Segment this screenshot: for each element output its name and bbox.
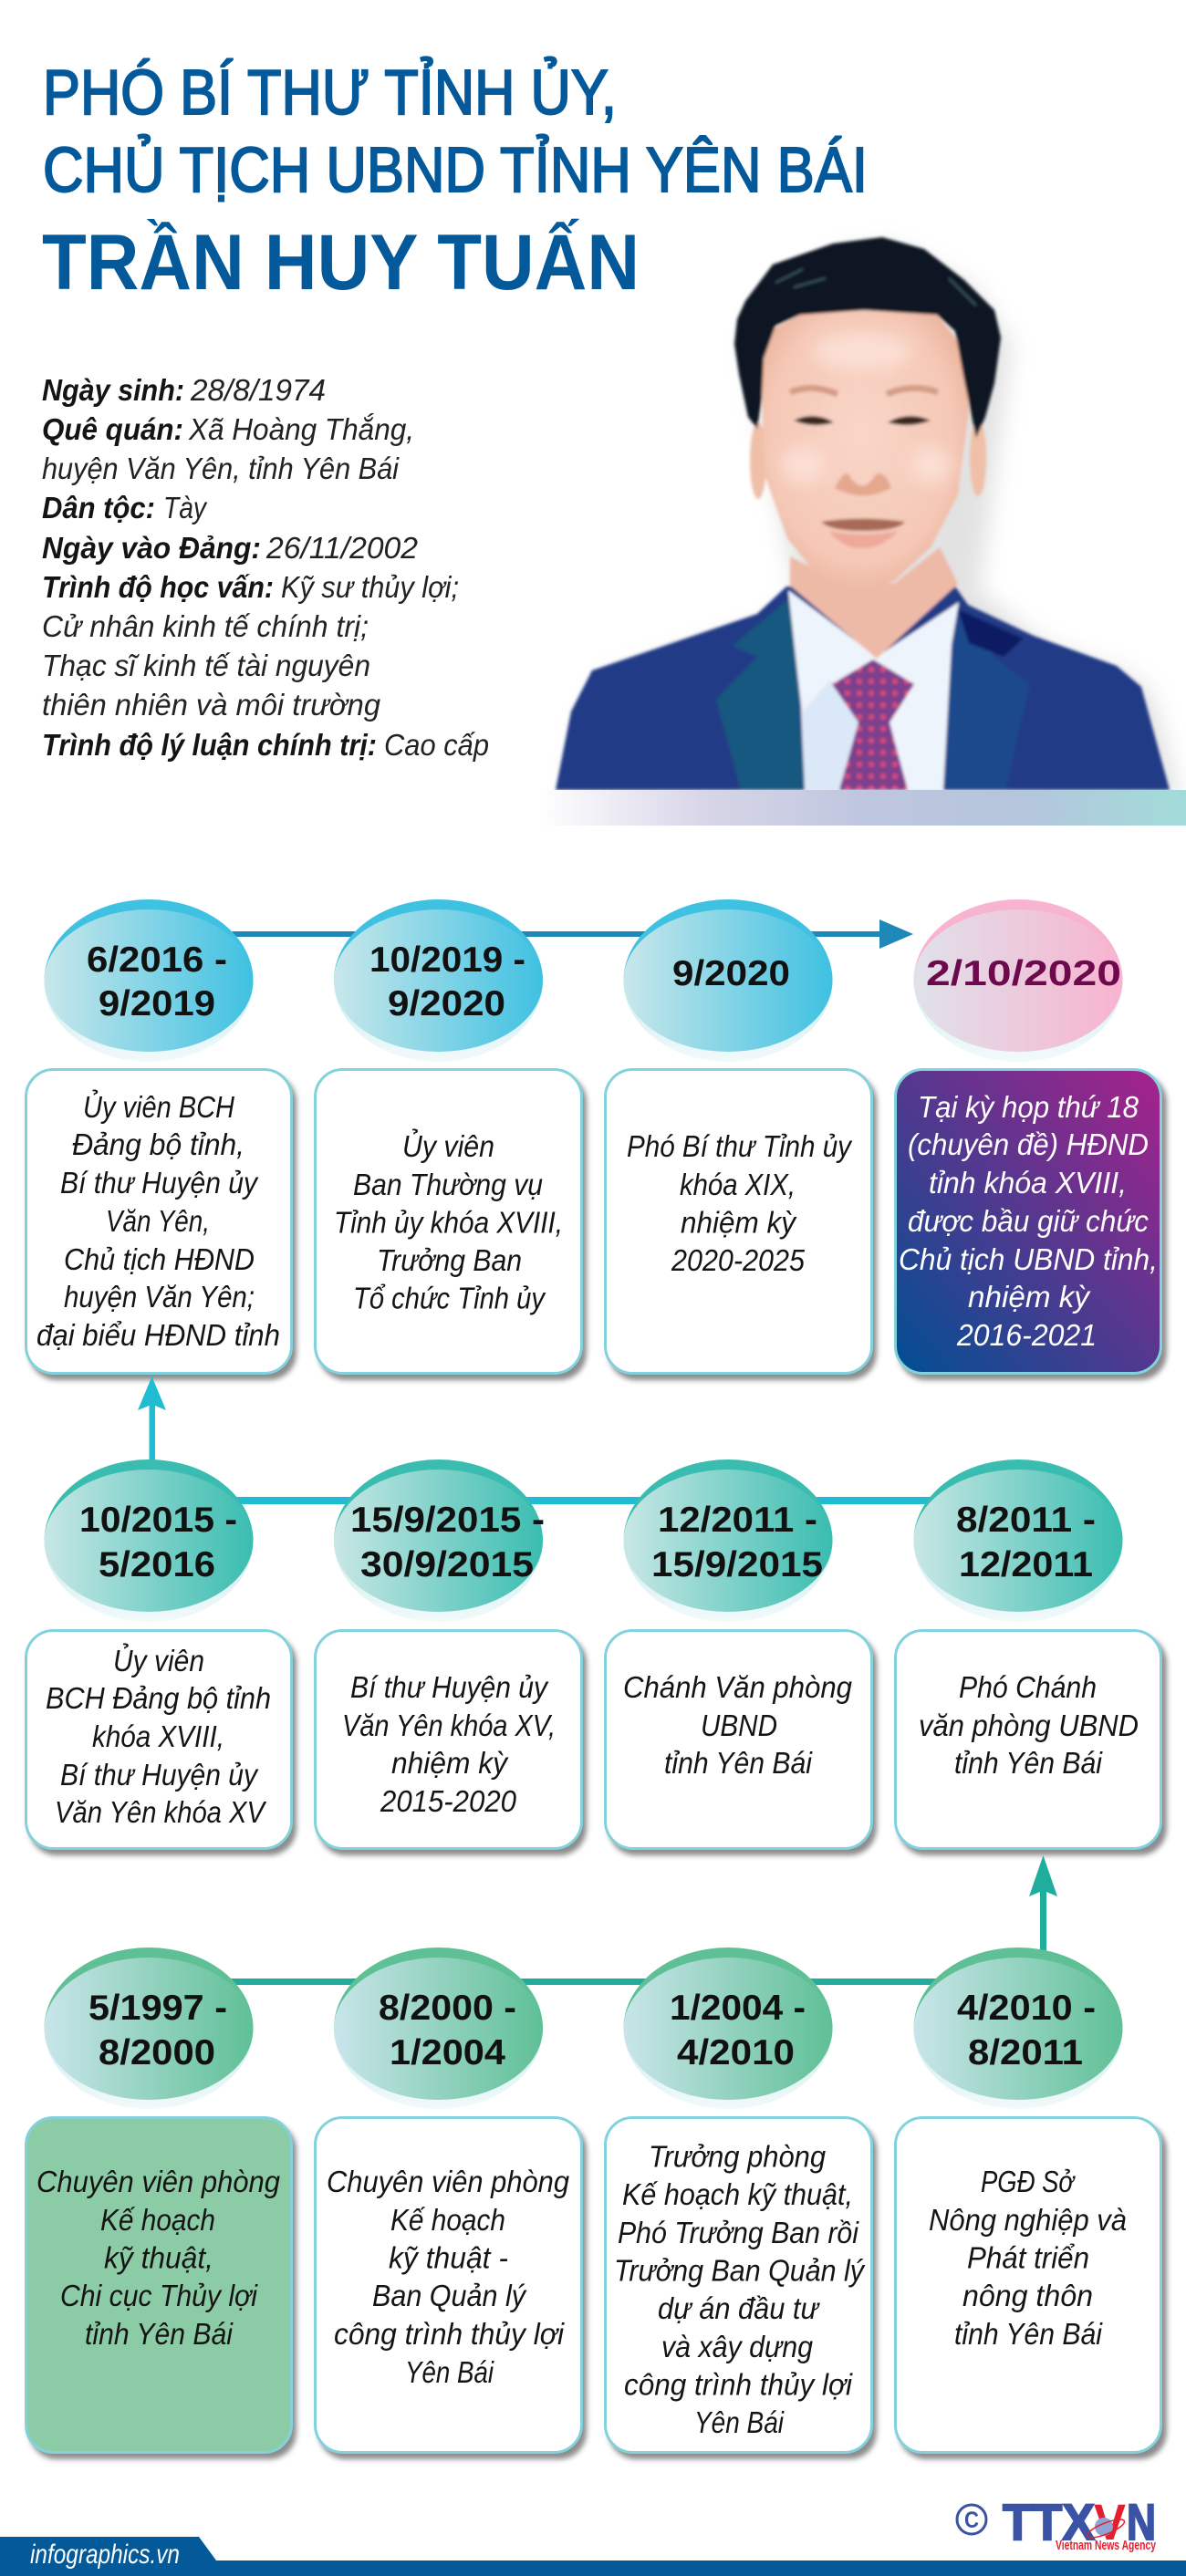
card: 2/10/2020 highlighted — [896, 1069, 1167, 1380]
shirt — [788, 590, 959, 790]
card: 12/2011: tỉnh Yên Bái — [664, 1746, 814, 1780]
card: 4/2010 — [896, 2118, 1167, 2459]
title: PHÓ BÍ THƯ TỈNH ỦY, — [43, 56, 617, 128]
date bubble: 12/2011 - 15/9/2015: 12/2011 - — [658, 1501, 817, 1540]
card: 8/2011 — [896, 1631, 1167, 1855]
card: 8/2000: Kế hoạch — [390, 2203, 505, 2237]
date bubble: 8/2000 - 1/2004: 1/2004 — [390, 2033, 505, 2072]
card: 15/9/2015: nhiệm kỳ — [391, 1746, 509, 1780]
text block: biography: Cao cấp — [384, 729, 489, 763]
text block: biography: Trình độ lý luận chính trị: — [42, 729, 377, 763]
date bubble: 2/10/2020 — [914, 899, 1122, 1062]
card: 10/2015: BCH Đảng bộ tỉnh — [46, 1681, 271, 1715]
card: 8/2000: Chuyên viên phòng — [327, 2165, 570, 2198]
card: 9/2020 — [606, 1069, 877, 1380]
card: 10/2019: Trưởng Ban — [377, 1243, 522, 1277]
card: 4/2010: nông thôn — [962, 2279, 1093, 2312]
date bubble: 1/2004 - 4/2010 — [624, 1948, 832, 2109]
date bubble: 9/2020 — [624, 899, 832, 1062]
card: 5/1997 highlighted: tỉnh Yên Bái — [85, 2317, 234, 2351]
date bubble: 8/2000 - 1/2004 — [334, 1948, 543, 2109]
card: 10/2015: khóa XVIII, — [92, 1719, 224, 1753]
text block: biography: Kỹ sư thủy lợi; — [281, 571, 459, 605]
hair — [734, 237, 1001, 438]
arrow: up to row 2 — [1029, 1855, 1057, 1952]
card: 2/10/2020 highlighted: Tại kỳ họp thứ 18 — [918, 1090, 1139, 1124]
card: 10/2015: Bí thư Huyện ủy — [60, 1758, 259, 1792]
date bubble: 10/2015 - 5/2016: 5/2016 — [99, 1545, 215, 1584]
logo: TTXVN — [957, 2493, 1156, 2553]
card: 6/2016: Ủy viên BCH — [83, 1089, 234, 1124]
card: 10/2019: Ban Thường vụ — [353, 1168, 543, 1201]
card: 1/2004: Trưởng Ban Quản lý — [614, 2253, 866, 2288]
date bubble: 5/1997 - 8/2000: 8/2000 — [99, 2033, 215, 2072]
text block: biography: Trình độ học vấn: — [42, 571, 274, 605]
card: 10/2019: Tổ chức Tỉnh ủy — [353, 1281, 546, 1315]
panel: timeline row 3 — [26, 1948, 1167, 2459]
tie — [832, 660, 914, 790]
text block: biography: Xã Hoàng Thắng, — [188, 413, 414, 447]
card: 2/10/2020 highlighted: Chủ tịch UBND tỉnh, — [899, 1242, 1158, 1276]
suit — [556, 587, 1170, 790]
text block: biography: huyện Văn Yên, tỉnh Yên Bái — [42, 452, 400, 486]
title: CHỦ TỊCH UBND TỈNH YÊN BÁI — [43, 133, 868, 205]
card: 10/2019: Ủy viên — [402, 1128, 494, 1163]
arrow: up to row 1 — [138, 1376, 166, 1464]
text block: biography: Quê quán: — [42, 413, 183, 447]
date bubble: 4/2010 - 8/2011: 4/2010 - — [957, 1989, 1096, 2028]
card: 6/2016: Chủ tịch HĐND — [64, 1242, 255, 1276]
date bubble: 10/2019 - 9/2020: 10/2019 - — [369, 940, 525, 980]
card: 6/2016: Văn Yên, — [106, 1204, 210, 1238]
date bubble: 1/2004 - 4/2010: 4/2010 — [677, 2033, 795, 2072]
date bubble: 10/2019 - 9/2020 — [334, 899, 543, 1062]
card: 12/2011: Chánh Văn phòng — [623, 1670, 853, 1704]
date bubble: 9/2020: 9/2020 — [672, 954, 790, 993]
card: 4/2010: PGĐ Sở — [981, 2165, 1077, 2198]
title: TRẦN HUY TUẤN — [42, 219, 640, 306]
card: 2/10/2020 highlighted: 2016-2021 — [956, 1318, 1097, 1352]
card: 6/2016: Bí thư Huyện ủy — [60, 1166, 259, 1200]
card: 5/1997 highlighted: Chi cục Thủy lợi — [60, 2279, 259, 2312]
card: 4/2010: Phát triển — [967, 2240, 1089, 2275]
card: 12/2011: UBND — [701, 1709, 777, 1742]
date bubble: 15/9/2015 - 30/9/2015 — [334, 1459, 545, 1622]
date bubble: 5/1997 - 8/2000 — [44, 1948, 254, 2109]
card: 9/2020: Phó Bí thư Tỉnh ủy — [627, 1129, 853, 1163]
date bubble: 15/9/2015 - 30/9/2015: 30/9/2015 — [360, 1545, 534, 1584]
date bubble: 6/2016 - 9/2019: 6/2016 - — [87, 940, 227, 980]
card: 5/1997 highlighted: Chuyên viên phòng — [36, 2165, 281, 2198]
text block: biography: 26/11/2002 — [265, 532, 418, 566]
card: 10/2015: Ủy viên — [113, 1643, 204, 1678]
arrow: row 1 connector — [149, 919, 913, 949]
card: 2/10/2020 highlighted: (chuyên đề) HĐND — [908, 1127, 1149, 1161]
card: 15/9/2015 — [316, 1631, 587, 1855]
cheek highlights — [781, 333, 951, 483]
card: 15/9/2015: 2015-2020 — [380, 1784, 517, 1818]
logo: TTXVN: V — [1094, 2493, 1126, 2550]
card: 8/2000: Yên Bái — [405, 2355, 494, 2389]
card: 5/1997 highlighted: Kế hoạch — [100, 2203, 215, 2237]
text block: biography: Ngày sinh: — [42, 374, 184, 408]
text block: biography: Thạc sĩ kinh tế tài nguyên — [42, 649, 370, 683]
card: 1/2004: Phó Trưởng Ban rồi — [618, 2216, 860, 2249]
card: 9/2020: 2020-2025 — [671, 1243, 806, 1277]
card: 8/2011: văn phòng UBND — [919, 1709, 1139, 1742]
footer bar with site name: infographics.vn — [30, 2540, 180, 2570]
card: 8/2000: kỹ thuật - — [389, 2240, 508, 2275]
card: 2/10/2020 highlighted: tỉnh khóa XVIII, — [929, 1166, 1127, 1200]
date bubble: 2/10/2020: 2/10/2020 — [926, 954, 1121, 993]
date bubble: 8/2011 - 12/2011 — [914, 1459, 1122, 1622]
date bubble: 4/2010 - 8/2011 — [914, 1948, 1122, 2109]
date bubble: 10/2015 - 5/2016: 10/2015 - — [79, 1501, 237, 1540]
card: 4/2010: Nông nghiệp và — [929, 2203, 1127, 2237]
text block: biography: Dân tộc: — [42, 492, 155, 525]
text block: biography: thiên nhiên và môi trường — [42, 689, 380, 722]
date bubble: 1/2004 - 4/2010: 1/2004 - — [670, 1989, 806, 2028]
nose — [835, 473, 891, 496]
card: 8/2011: tỉnh Yên Bái — [954, 1746, 1104, 1780]
text block: biography: Ngày vào Đảng: — [42, 532, 261, 566]
gradient band under portrait — [538, 790, 1186, 826]
card: 1/2004: Kế hoạch kỹ thuật, — [622, 2177, 853, 2211]
card: 8/2011: Phó Chánh — [959, 1670, 1097, 1704]
card: 10/2019 — [316, 1069, 587, 1380]
card: 10/2015: Văn Yên khóa XV — [55, 1795, 267, 1829]
card: 6/2016: Đảng bộ tỉnh, — [72, 1127, 244, 1161]
card: 8/2000: Ban Quản lý — [372, 2279, 527, 2312]
date bubble: 6/2016 - 9/2019: 9/2019 — [99, 984, 215, 1023]
card: 2/10/2020 highlighted: được bầu giữ chức — [908, 1204, 1149, 1238]
eyes — [794, 416, 834, 425]
connector row 2 — [149, 1497, 1027, 1504]
date bubble: 10/2019 - 9/2020: 9/2020 — [388, 984, 505, 1023]
card: 10/2015 — [26, 1631, 296, 1855]
logo: TTXVN: N — [1127, 2493, 1156, 2550]
card: 5/1997 highlighted — [26, 2118, 296, 2459]
card: 2/10/2020 highlighted: nhiệm kỳ — [968, 1280, 1092, 1314]
logo: TTXVN: C — [964, 2508, 979, 2533]
card: 1/2004: công trình thủy lợi — [624, 2368, 854, 2401]
card: 15/9/2015: Bí thư Huyện ủy — [350, 1670, 549, 1704]
card: 6/2016 — [26, 1069, 296, 1380]
card: 8/2000 — [316, 2118, 587, 2459]
card: 15/9/2015: Văn Yên khóa XV, — [342, 1709, 556, 1742]
card: 1/2004: Trưởng phòng — [649, 2140, 827, 2173]
date bubble: 4/2010 - 8/2011: 8/2011 — [968, 2033, 1083, 2072]
date bubble: 15/9/2015 - 30/9/2015: 15/9/2015 - — [350, 1501, 545, 1540]
card: 10/2019: Tỉnh ủy khóa XVIII, — [334, 1206, 563, 1239]
date bubble: 5/1997 - 8/2000: 5/1997 - — [88, 1989, 227, 2028]
date bubble: 12/2011 - 15/9/2015 — [624, 1459, 832, 1622]
card: 9/2020: nhiệm kỳ — [681, 1206, 797, 1239]
connector row 3 — [149, 1979, 1018, 1985]
logo: TTXVN: TTX — [1003, 2493, 1095, 2550]
mouth — [821, 518, 905, 531]
card: 8/2000: công trình thủy lợi — [334, 2317, 566, 2351]
card: 1/2004 — [606, 2118, 877, 2459]
title — [42, 56, 868, 306]
card: 12/2011 — [606, 1631, 877, 1855]
panel: timeline row 1 — [26, 899, 1167, 1380]
date bubble: 8/2000 - 1/2004: 8/2000 - — [379, 1989, 516, 2028]
brows — [790, 388, 938, 394]
date bubble: 10/2015 - 5/2016 — [44, 1459, 254, 1622]
card: 9/2020: khóa XIX, — [680, 1168, 796, 1201]
neck — [790, 547, 958, 659]
card: 1/2004: Yên Bái — [694, 2405, 785, 2439]
card: 4/2010: tỉnh Yên Bái — [954, 2317, 1104, 2351]
text block: biography: Tày — [163, 492, 208, 525]
date bubble: 12/2011 - 15/9/2015: 15/9/2015 — [651, 1545, 823, 1584]
date bubble: 8/2011 - 12/2011: 8/2011 - — [956, 1501, 1096, 1540]
footer bar with site name — [0, 2537, 1186, 2576]
portrait photo — [556, 237, 1181, 797]
card: 1/2004: và xây dựng — [661, 2330, 814, 2363]
card: 6/2016: huyện Văn Yên; — [64, 1280, 255, 1314]
panel: timeline row 2 — [26, 1459, 1167, 1855]
card: 1/2004: dự án đầu tư — [658, 2291, 820, 2325]
text block: biography: 28/8/1974 — [190, 374, 326, 408]
date bubble: 6/2016 - 9/2019 — [44, 899, 254, 1062]
text block: biography — [42, 374, 489, 763]
text block: biography: Cử nhân kinh tế chính trị; — [42, 610, 369, 644]
card: 6/2016: đại biểu HĐND tỉnh — [36, 1318, 280, 1352]
face — [762, 310, 969, 591]
ears — [750, 422, 766, 499]
date bubble: 8/2011 - 12/2011: 12/2011 — [959, 1545, 1093, 1584]
card: 5/1997 highlighted: kỹ thuật, — [104, 2240, 213, 2275]
